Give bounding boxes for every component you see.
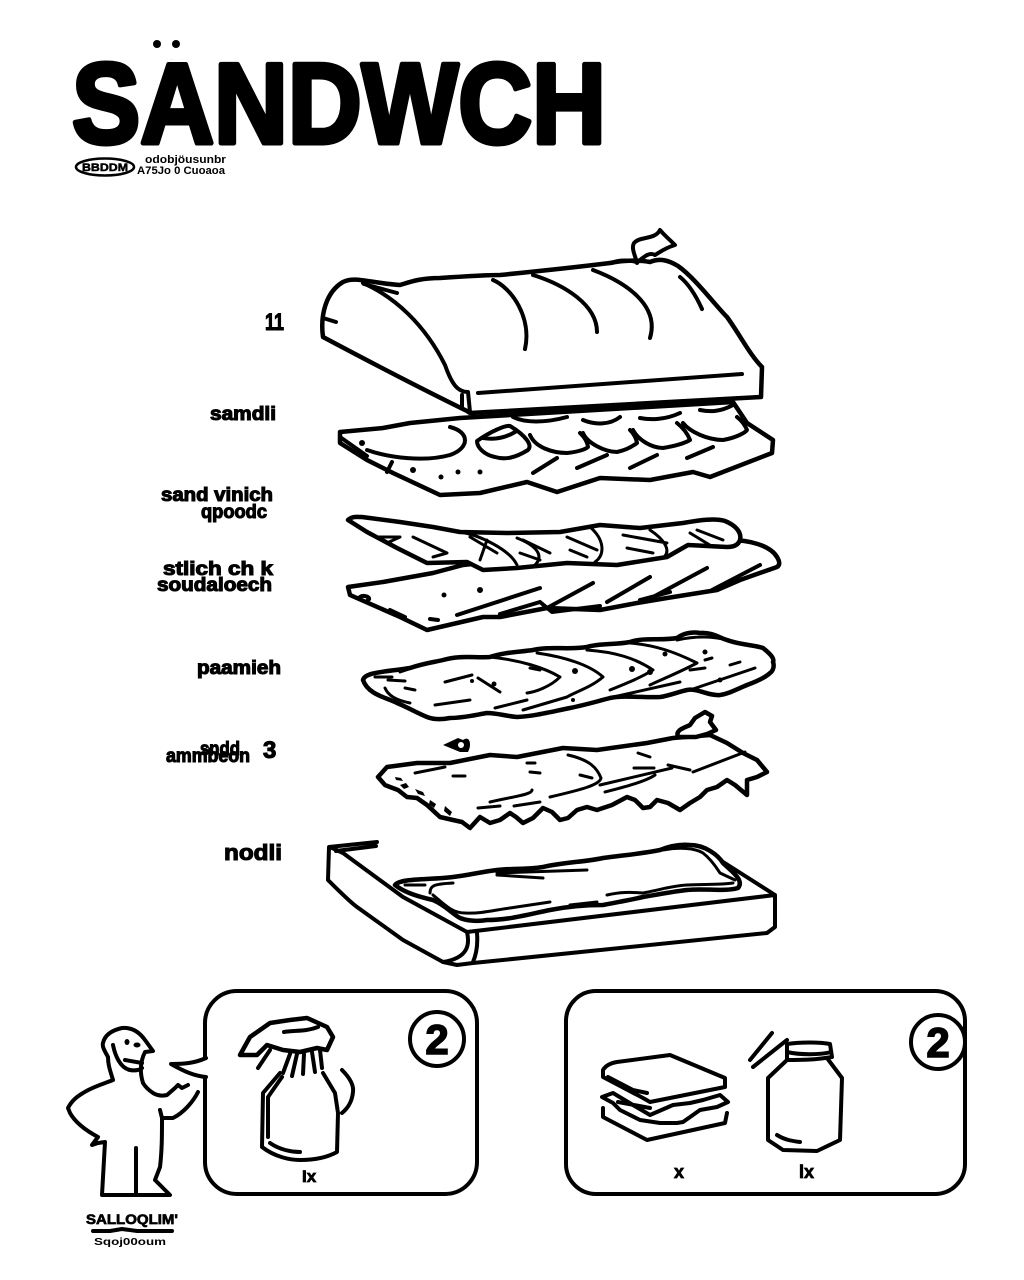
layer: cheese slices	[363, 633, 774, 719]
step number	[911, 1015, 965, 1069]
layer: tomato strip	[348, 517, 740, 570]
layer: top bread	[322, 230, 762, 413]
labels column	[157, 309, 284, 865]
labels column: samdli	[210, 404, 276, 425]
icon: jar	[750, 1033, 842, 1151]
labels column: stlich ch k	[163, 559, 274, 580]
layer: toasted base slice with spread	[328, 842, 775, 965]
layer: meat slices	[348, 540, 779, 630]
brand logo and small text: A75Jo 0 Cuoaoa	[137, 165, 226, 177]
brand caption	[86, 1211, 178, 1248]
labels column: paamieh	[197, 658, 281, 679]
face	[113, 1039, 142, 1070]
labels column: 11	[265, 309, 284, 336]
layer: lettuce	[378, 712, 767, 828]
step number	[410, 1012, 464, 1066]
panel: finished sandwich and jar	[566, 991, 965, 1194]
brand caption: Sqoj00oum	[94, 1237, 166, 1248]
labels column: sand vinich	[161, 485, 273, 506]
labels column: ammbeon	[166, 746, 250, 767]
labels column: sndd	[200, 739, 240, 760]
panel: finished sandwich and jar: lx	[799, 1162, 814, 1182]
step number: 2	[425, 1016, 449, 1063]
labels column: qpoodc	[201, 502, 267, 523]
quantity labels: x	[674, 1162, 684, 1182]
title: SÄNDWCH	[72, 41, 606, 168]
brand logo and small text: BBDDM	[82, 162, 128, 174]
icon: sandwich	[602, 1055, 728, 1140]
step number: 2	[926, 1019, 950, 1066]
brand logo and small text: odobjöusunbr	[145, 154, 227, 166]
labels column: 3	[263, 737, 276, 764]
quantity label: Ix	[302, 1167, 317, 1186]
layer: sliced meat with lettuce and cheese	[340, 402, 773, 495]
panel: ingredient bag	[171, 991, 477, 1194]
brand caption: SALLOQLIM'	[86, 1211, 178, 1227]
character with speech panel 1	[68, 991, 477, 1195]
brand logo and small text	[76, 154, 227, 177]
icon: bag	[240, 1018, 353, 1160]
labels column: soudaloech	[157, 575, 272, 596]
labels column: nodli	[224, 840, 282, 865]
figure	[68, 1028, 198, 1195]
